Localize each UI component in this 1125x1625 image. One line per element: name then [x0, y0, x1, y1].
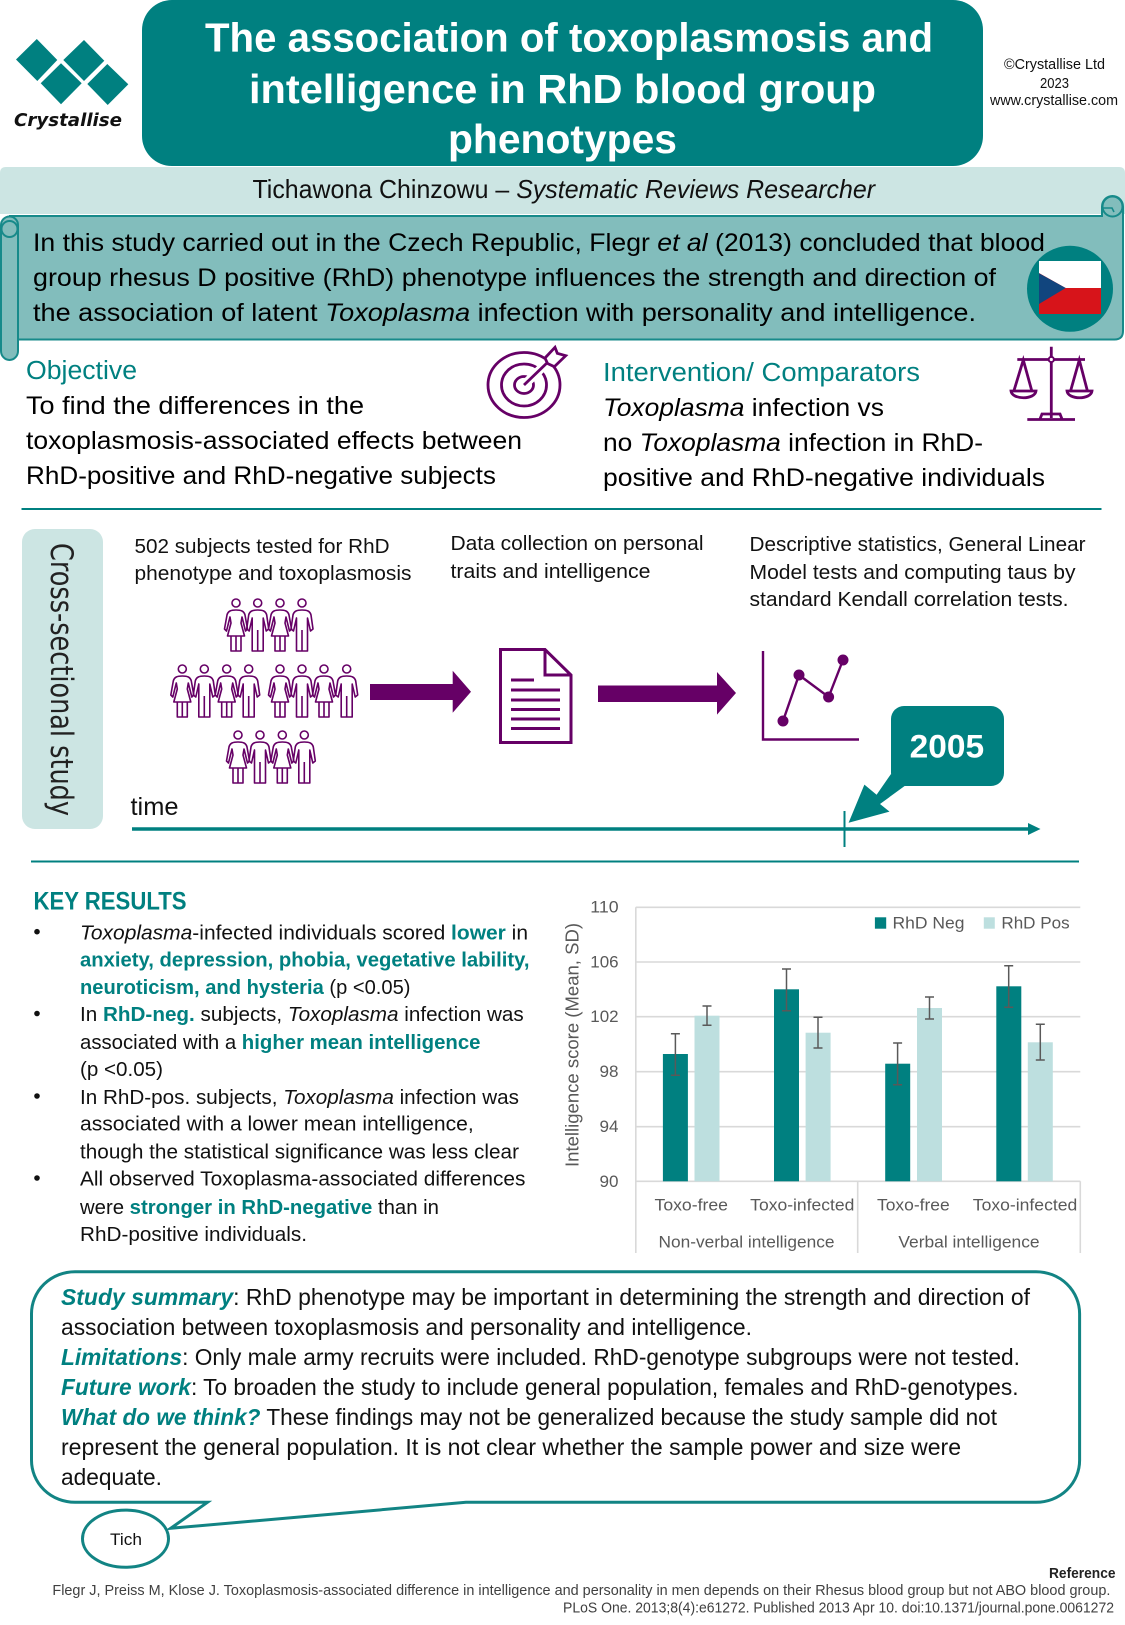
- author band: Tichawona Chinzowu – Systematic Reviews Researcher: [252, 174, 876, 204]
- timeline: time: [130, 793, 178, 821]
- panel: intervention and comparators: Intervention/ Comparators: [603, 359, 920, 387]
- speech bubble: study summary: [31, 1272, 1080, 1528]
- bar chart: intelligence score: Toxo-infected: [973, 1196, 1077, 1215]
- panel: intervention and comparators: [603, 359, 1045, 492]
- panel: key results: anxiety, depression, phobia, vegetative lability,: [80, 949, 530, 972]
- logo: Crystallise: [14, 39, 128, 131]
- panel: key results: associated with a lower mean intelligence,: [80, 1113, 474, 1136]
- scroll panel: study introduction: the association of latent Toxoplasma infection with personality and intelligence.: [33, 299, 976, 327]
- panel: objective: [26, 357, 522, 490]
- step 1 text: 502 subjects tested for RhD: [134, 535, 390, 558]
- step 2 text: [450, 532, 704, 583]
- bar chart: intelligence score: 106: [590, 952, 619, 972]
- speech bubble: study summary: adequate.: [61, 1464, 162, 1490]
- step 1 text: [134, 535, 412, 585]
- panel: key results: KEY RESULTS: [34, 887, 186, 915]
- bar chart: intelligence score: RhD Pos: [1001, 914, 1070, 933]
- speech bubble: study summary: Future work: To broaden the study to include general population, females and RhD-genotypes.: [61, 1374, 1019, 1400]
- speech bubble: study summary: What do we think? These findings may not be generalized because the study sample did not: [61, 1404, 998, 1430]
- speech bubble: study summary: represent the general population. It is not clear whether the sample power and size were: [61, 1434, 961, 1460]
- callout: 2005: [849, 706, 1004, 823]
- panel: key results: In RhD-pos. subjects, Toxoplasma infection was: [80, 1086, 519, 1109]
- bar chart: intelligence score: Toxo-infected: [750, 1196, 854, 1215]
- bar chart: intelligence score: 110: [590, 898, 619, 917]
- panel: key results: associated with a higher mean intelligence: [80, 1031, 480, 1054]
- panel: key results: [34, 887, 530, 1246]
- reference: Flegr J, Preiss M, Klose J. Toxoplasmosis-associated difference in intelligence and personality in men depends on their Rhesus blood group but not ABO blood group.: [52, 1583, 1110, 1599]
- step 3 text: [750, 533, 1086, 611]
- panel: intervention and comparators: positive and RhD-negative individuals: [603, 464, 1045, 492]
- step 3 text: standard Kendall correlation tests.: [750, 588, 1068, 611]
- icon: line chart: [763, 651, 859, 740]
- speech bubble: study summary: Study summary: RhD phenotype may be important in determining the strength and direction of: [61, 1284, 1031, 1310]
- title banner: The association of toxoplasmosis and: [205, 14, 933, 60]
- icon: Czech flag: [1027, 246, 1113, 332]
- reference: [52, 1566, 1115, 1617]
- panel: key results: neuroticism, and hysteria (p <0.05): [80, 976, 410, 999]
- step 3 text: Descriptive statistics, General Linear: [750, 533, 1086, 556]
- panel: key results: Toxoplasma-infected individuals scored lower in: [80, 921, 528, 944]
- panel: objective: To find the differences in the: [26, 392, 364, 420]
- title banner: intelligence in RhD blood group: [249, 66, 876, 112]
- label: cross-sectional study: [22, 529, 103, 829]
- title banner: [142, 0, 983, 166]
- author badge: Tich: Tich: [110, 1530, 142, 1549]
- bar chart: intelligence score: RhD Neg: [892, 914, 964, 933]
- bar chart: intelligence score: [562, 898, 1080, 1253]
- step 3 text: Model tests and computing taus by: [750, 561, 1076, 584]
- scroll panel: study introduction: [1, 196, 1123, 360]
- divider: [31, 860, 1079, 862]
- bar chart: intelligence score: Toxo-free: [877, 1196, 950, 1215]
- panel: key results: (p <0.05): [80, 1058, 163, 1081]
- bar chart: intelligence score: Intelligence score (Mean, SD): [562, 923, 582, 1167]
- timeline: [130, 793, 1040, 847]
- panel: objective: toxoplasmosis-associated effects between: [26, 427, 522, 455]
- arrow: people to document: [370, 671, 471, 713]
- step 1 text: phenotype and toxoplasmosis: [134, 562, 412, 585]
- panel: objective: Objective: [26, 357, 137, 385]
- scroll panel: study introduction: In this study carried out in the Czech Republic, Flegr et al (2013) concluded that blood: [33, 229, 1045, 257]
- icon: document: [500, 650, 571, 742]
- bar chart: intelligence score: 98: [600, 1062, 618, 1081]
- panel: intervention and comparators: Toxoplasma infection vs: [603, 394, 884, 422]
- reference: Reference: [1049, 1566, 1116, 1582]
- bar chart: intelligence score: 94: [600, 1117, 618, 1136]
- panel: key results: All observed Toxoplasma-associated differences: [80, 1168, 525, 1191]
- copyright note: 2023: [1040, 76, 1069, 92]
- step 2 text: traits and intelligence: [450, 560, 650, 583]
- copyright note: ©Crystallise Ltd: [1004, 57, 1105, 73]
- divider: [22, 508, 1102, 510]
- icon: target: [488, 347, 566, 418]
- panel: objective: RhD-positive and RhD-negative subjects: [26, 462, 496, 490]
- bar chart: intelligence score: Toxo-free: [654, 1196, 728, 1215]
- panel: key results: though the statistical significance was less clear: [80, 1141, 519, 1164]
- logo: Crystallise: Crystallise: [14, 110, 122, 131]
- arrow: document to chart: [598, 672, 736, 715]
- copyright note: www.crystallise.com: [989, 93, 1118, 109]
- bar chart: intelligence score: 90: [600, 1172, 618, 1191]
- label: cross-sectional study: Cross-sectional study: [43, 543, 79, 816]
- icon: scales: [1011, 347, 1092, 420]
- bar chart: intelligence score: Verbal intelligence: [898, 1232, 1040, 1251]
- callout: 2005: 2005: [910, 728, 984, 764]
- reference: PLoS One. 2013;8(4):e61272. Published 2013 Apr 10. doi:10.1371/journal.pone.0061272: [563, 1601, 1114, 1617]
- speech bubble: study summary: Limitations: Only male army recruits were included. RhD-genotype subgroups were not tested.: [61, 1344, 1020, 1370]
- step 2 text: Data collection on personal: [450, 532, 704, 555]
- icon: groups of people: [171, 599, 358, 783]
- panel: key results: were stronger in RhD-negative than in: [79, 1196, 439, 1219]
- speech bubble: study summary: association between toxoplasmosis and personality and intelligence.: [61, 1314, 752, 1340]
- scroll panel: study introduction: group rhesus D positive (RhD) phenotype influences the strength and direction of: [33, 264, 996, 292]
- bar chart: intelligence score: 102: [590, 1007, 619, 1026]
- author badge: Tich: [82, 1510, 168, 1567]
- panel: key results: RhD-positive individuals.: [80, 1223, 307, 1246]
- panel: key results: In RhD-neg. subjects, Toxoplasma infection was: [80, 1003, 524, 1026]
- title banner: phenotypes: [448, 116, 677, 162]
- author band: [0, 167, 1125, 214]
- bar chart: intelligence score: Non-verbal intelligence: [658, 1232, 834, 1251]
- copyright note: [989, 57, 1118, 109]
- panel: intervention and comparators: no Toxoplasma infection in RhD-: [603, 429, 983, 457]
